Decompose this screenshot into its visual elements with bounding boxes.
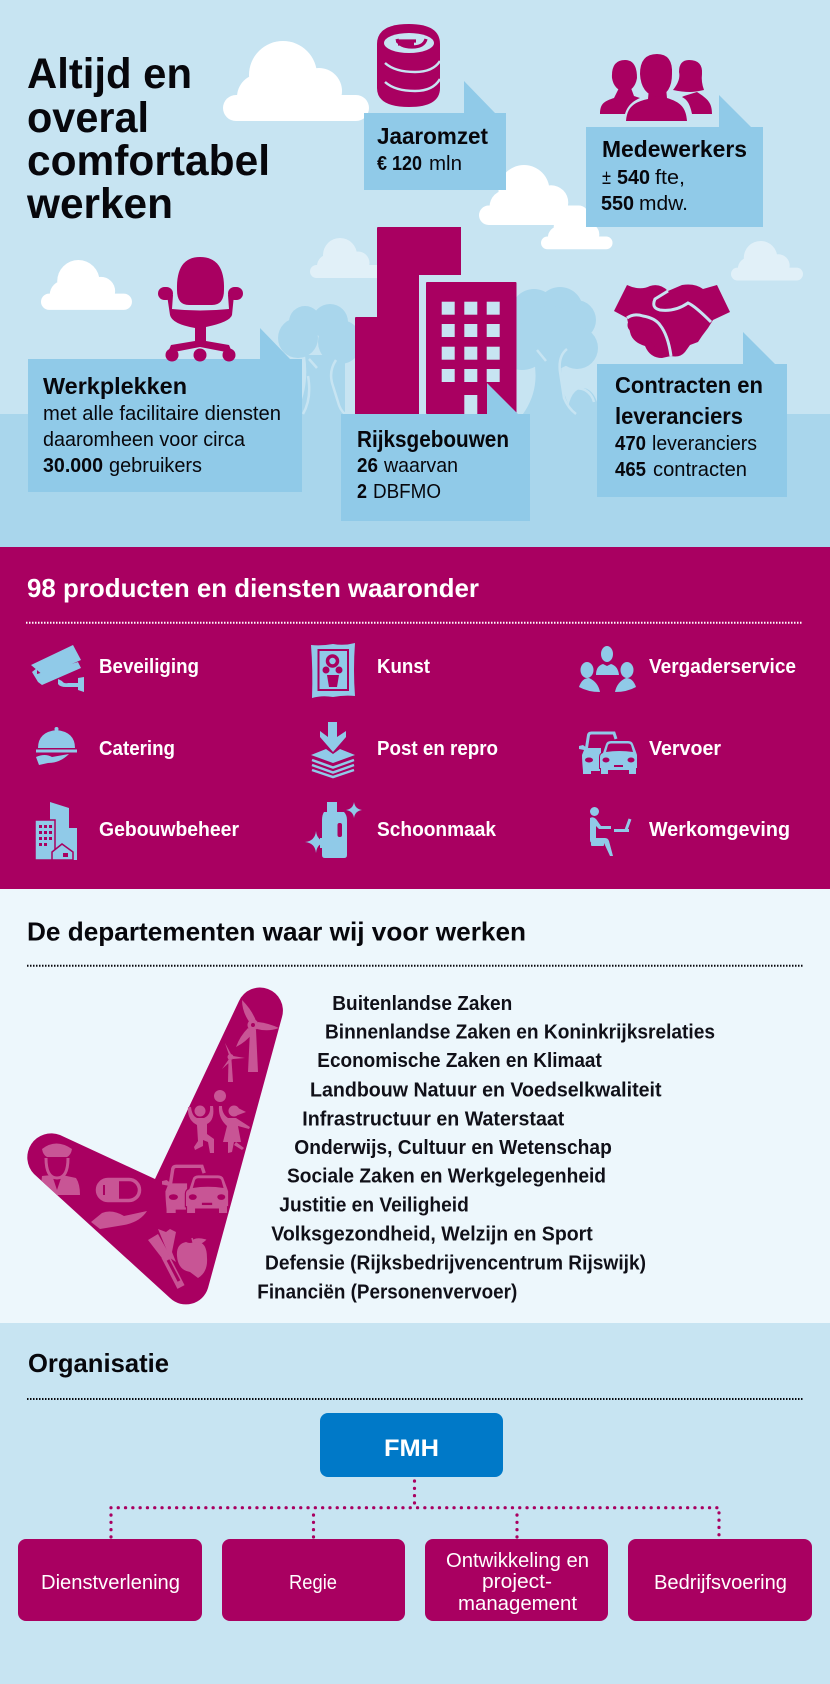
callout: Contracten en leveranciers: contracten [653,459,747,481]
callout: Jaaromzet [364,81,506,190]
item: Gebouwbeheer: Gebouwbeheer [99,819,239,841]
icon: playing children [188,1090,250,1153]
list: departementen: Binnenlandse Zaken en Koninkrijksrelaties [325,1022,715,1044]
check mark with icons [27,988,283,1304]
box: Ontwikkeling en projectmanagement [425,1539,608,1621]
panel: organisatie [0,1323,830,1684]
callout: Jaaromzet: mln [429,153,462,175]
item: Beveiliging: Beveiliging [99,656,199,678]
heading: departementen: De departementen waar wij voor werken [27,916,526,946]
item: Post en repro: Post en repro [377,738,498,760]
item: Werkomgeving [590,807,790,856]
item: Vervoer [579,733,721,774]
item: Werkomgeving: Werkomgeving [649,819,790,841]
callout: Rijksgebouwen: waarvan [383,455,458,477]
list: departementen [257,993,715,1304]
callout: Medewerkers: ± [602,167,611,189]
icon: three people [600,54,712,121]
callout: Werkplekken [28,328,302,492]
title: comfortabel [27,137,270,185]
callout: Werkplekken: 30.000 [43,455,103,477]
callout: Medewerkers: fte, [655,167,685,189]
title: overal [27,94,149,142]
tree right [495,287,598,414]
cloud white small [541,210,613,249]
item: Schoonmaak: Schoonmaak [377,819,497,841]
box: Ontwikkeling en projectmanagement: management [458,1593,577,1615]
icon: cars [162,1166,228,1213]
list: departementen: Economische Zaken en Klimaat [317,1050,602,1072]
box: Regie [222,1539,405,1621]
box: Bedrijfsvoering: Bedrijfsvoering [654,1572,787,1594]
item: Kunst: Kunst [377,656,430,678]
tree left [278,304,362,414]
item: Gebouwbeheer [35,802,239,860]
cloud left [41,260,132,310]
item: Vergaderservice: Vergaderservice [649,656,796,678]
icon: coin stack [377,24,440,107]
icon: leek and apple [148,1229,207,1287]
title: werken [26,180,173,228]
panel: producten en diensten [0,547,830,889]
icon: pill and hand [91,1180,147,1229]
box: Regie: Regie [289,1572,337,1594]
callout: Contracten en leveranciers: 465 [615,459,646,481]
box: Ontwikkeling en projectmanagement: project- [482,1571,552,1593]
item: Kunst [311,643,430,698]
heading: producten: 98 producten en diensten waaronder [27,573,479,603]
box: Bedrijfsvoering [628,1539,812,1621]
icon: wind turbines [222,1000,279,1082]
cloud top centre [223,41,369,121]
cloud white middle [479,165,588,225]
callout: Werkplekken: daaromheen voor circa [43,429,246,451]
panel: departementen [0,889,830,1323]
list: departementen: Infrastructuur en Waterstaat [302,1108,565,1130]
item: Catering [36,727,175,765]
list: departementen: Defensie (Rijksbedrijvencentrum Rijswijk) [265,1252,646,1274]
callout: Contracten en leveranciers: Contracten en [615,372,763,398]
list: departementen: Landbouw Natuur en Voedselkwaliteit [310,1080,662,1102]
callout: Medewerkers: mdw. [639,193,688,215]
org connectors [111,1481,719,1538]
callout: Medewerkers [586,95,763,227]
callout: Medewerkers: 540 [617,167,650,189]
callout: Medewerkers: 550 [601,193,634,215]
callout: Werkplekken: gebruikers [109,455,202,477]
list: departementen: Financiën (Personenvervoer) [257,1282,517,1304]
callout: Contracten en leveranciers: leveranciers [652,433,757,455]
callout: Rijksgebouwen [341,383,530,521]
list: departementen: Justitie en Veiligheid [279,1194,469,1216]
callout: Rijksgebouwen: 26 [357,455,378,477]
icon: officer [40,1144,80,1195]
box: FMH [320,1413,503,1477]
icon: office chair [158,257,243,362]
item: Schoonmaak [305,802,497,858]
heading: organisatie: Organisatie [28,1348,169,1378]
box: Dienstverlening: Dienstverlening [41,1572,180,1594]
list: departementen: Buitenlandse Zaken [332,993,512,1015]
callout: Werkplekken: Werkplekken [43,373,187,399]
list: departementen: Onderwijs, Cultuur en Wetenschap [294,1137,612,1159]
callout: Medewerkers: Medewerkers [602,136,747,162]
list: departementen: Sociale Zaken en Werkgelegenheid [287,1166,606,1188]
box: Ontwikkeling en projectmanagement: Ontwikkeling en [446,1550,589,1572]
callout: Contracten en leveranciers [597,332,787,497]
icon: handshake [614,284,730,358]
cloud pale right [731,241,803,280]
item: Vergaderservice [579,646,796,692]
panel: hero illustration [0,0,830,547]
callout: Contracten en leveranciers: leveranciers [615,403,743,429]
callout: Rijksgebouwen: 2 [357,481,367,503]
title [26,50,270,228]
item: Post en repro [311,722,498,777]
callout: Jaaromzet: € 120 [377,153,422,175]
box: Dienstverlening [18,1539,202,1621]
callout: Jaaromzet: Jaaromzet [377,123,488,149]
item: Beveiliging [31,645,199,692]
callout: Werkplekken: met alle facilitaire diensten [43,403,281,425]
callout: Contracten en leveranciers: 470 [615,433,646,455]
title: Altijd en [27,50,192,98]
item: Catering: Catering [99,738,175,760]
cloud pale centre [310,238,383,278]
item: Vervoer: Vervoer [649,738,721,760]
list: departementen: Volksgezondheid, Welzijn en Sport [271,1224,593,1246]
callout: Rijksgebouwen: Rijksgebouwen [357,426,509,452]
callout: Rijksgebouwen: DBFMO [373,481,441,503]
icon: building [355,227,516,414]
box: FMH: FMH [384,1435,439,1462]
